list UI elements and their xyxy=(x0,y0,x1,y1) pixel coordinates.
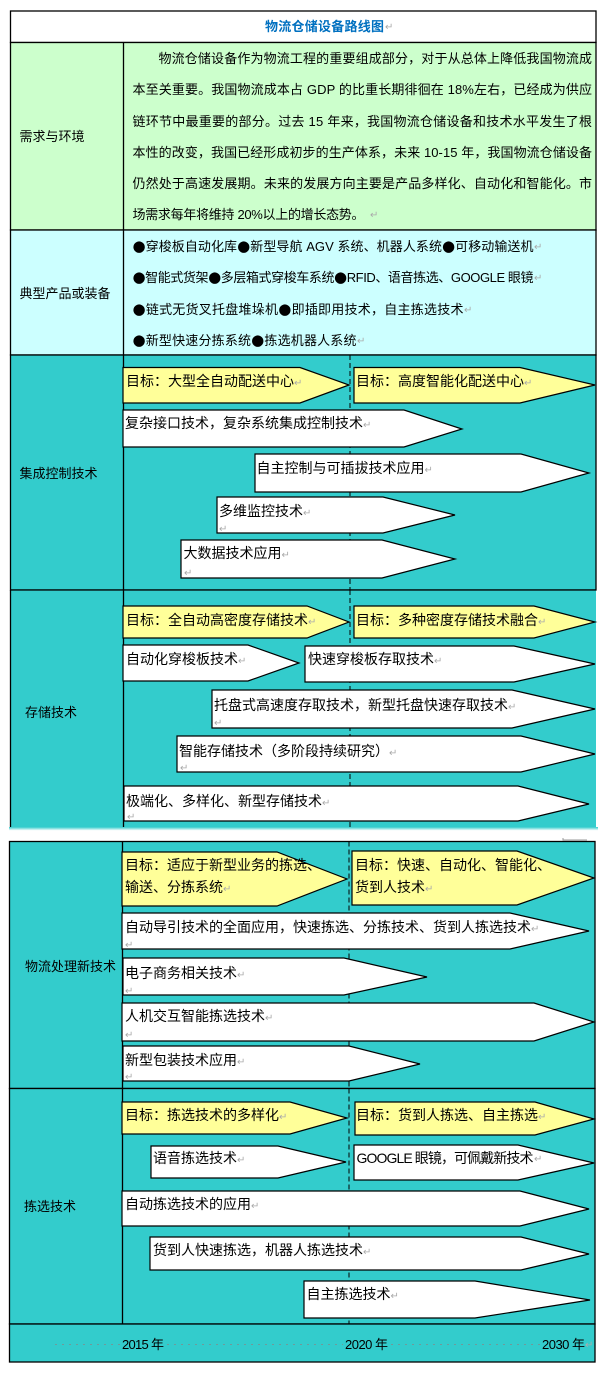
arrow: robot picking xyxy=(150,1237,589,1270)
arrow: pallet storage: ↵ xyxy=(214,718,222,729)
arrow: extreme storage xyxy=(124,786,589,823)
arrow: extreme storage: ↵ xyxy=(127,812,135,823)
product list: ↵ xyxy=(534,273,542,284)
goal arrow: diverse picking xyxy=(122,1102,347,1134)
paragraph: demand description: 场需求每年将维持 20%以上的增长态势。 xyxy=(132,207,364,222)
goal arrow: diverse picking: 目标：拣选技术的多样化↵ xyxy=(125,1107,287,1123)
arrow: Google glasses xyxy=(354,1145,594,1180)
goal arrow: multi-density fusion xyxy=(354,606,595,638)
arrow: big data: ↵ xyxy=(184,568,192,579)
arrow: fast shuttle xyxy=(305,646,595,682)
goal arrow: new business picking systems: 输送、分拣系统↵ xyxy=(125,879,231,895)
arrow: automated shuttle: 自动化穿梭板技术↵ xyxy=(126,651,246,667)
goal arrow: new business picking systems: 目标：适应于新型业务的拣选、 xyxy=(125,857,321,873)
goal arrow: new business picking systems xyxy=(122,852,347,906)
arrow: packaging: 新型包装技术应用↵ xyxy=(125,1052,245,1068)
paragraph: demand description: 本性的改变，我国已经形成初步的生产体系，未来 10-15 年，我国物流仓储设备 xyxy=(132,145,592,160)
arrow: human machine interaction: 人机交互智能拣选技术↵ xyxy=(125,1008,273,1024)
label: picking: 拣选技术 xyxy=(24,1199,76,1214)
arrow: voice picking xyxy=(151,1146,346,1178)
goal arrow: goods to person xyxy=(355,1102,594,1135)
arrow: intelligent storage xyxy=(177,736,595,774)
arrow: big data: 大数据技术应用↵ xyxy=(184,545,290,561)
arrow: automated guidance: ↵ xyxy=(125,940,133,951)
product list: ●穿梭板自动化库●新型导航 AGV 系统、机器人系统●可移动输送机 xyxy=(132,237,534,255)
goal arrow: fast automated goods to person xyxy=(352,851,594,905)
arrow: complex interface technology xyxy=(123,410,462,447)
product list: ↵ xyxy=(357,336,365,347)
arrow: intelligent storage: 智能存储技术（多阶段持续研究）↵ xyxy=(179,743,397,759)
arrow: Google glasses: GOOGLE 眼镜，可佩戴新技术 xyxy=(356,1150,534,1166)
arrow: e-commerce xyxy=(123,958,427,997)
arrow: autonomous control xyxy=(255,454,589,492)
arrow: automated guidance: 自动导引技术的全面应用，快速拣选、分拣技术、货到人拣选技术↵ xyxy=(125,919,539,935)
goal arrow: fast automated goods to person: 货到人技术↵ xyxy=(355,879,433,895)
arrow: complex interface technology: 复杂接口技术，复杂系统集成控制技术↵ xyxy=(125,415,371,431)
arrow: Google glasses: ↵ xyxy=(534,1154,542,1165)
arrow: multi-dimensional monitoring xyxy=(217,497,455,535)
goal arrow: fast automated goods to person: 目标：快速、自动化、智能化、 xyxy=(355,857,551,873)
paragraph: demand description: 本至关重要。我国物流成本占 GDP 的比重长期徘徊在 18%左右，已经成为供应 xyxy=(132,82,592,97)
goal arrow: goods to person: 目标：货到人拣选、自主拣选↵ xyxy=(356,1107,546,1123)
paragraph: demand description: ↵ xyxy=(370,210,378,221)
arrow: e-commerce: 电子商务相关技术↵ xyxy=(125,965,245,981)
product list: ●链式无货叉托盘堆垛机●即插即用技术，自主拣选技术 xyxy=(132,300,464,318)
label: logistics handling: 物流处理新技术 xyxy=(25,959,116,974)
arrow: autonomous picking: 自主拣选技术↵ xyxy=(306,1286,399,1302)
arrow: human machine interaction xyxy=(122,1003,594,1041)
product list: ●智能式货架●多层箱式穿梭车系统●RFID、语音拣选、GOOGLE 眼镜 xyxy=(132,268,534,286)
arrow: pallet storage xyxy=(212,690,595,729)
product list: ↵ xyxy=(464,305,472,316)
arrow: human machine interaction: ↵ xyxy=(125,1030,133,1041)
arrow: automated guidance xyxy=(122,913,589,951)
label: integrated control: 集成控制技术 xyxy=(20,466,98,481)
arrow: robot picking: 货到人快速拣选，机器人拣选技术↵ xyxy=(153,1242,371,1258)
arrow: automated picking xyxy=(122,1191,589,1226)
product list xyxy=(132,237,542,349)
arrow: packaging xyxy=(123,1046,420,1083)
paragraph: demand description xyxy=(132,51,592,222)
goal arrow: multi-density fusion: 目标：多种密度存储技术融合↵ xyxy=(356,612,546,628)
goal arrow: highly intelligent distribution center: 目标：高度智能化配送中心↵ xyxy=(356,373,532,389)
panel: new logistics handling technology xyxy=(10,842,595,1088)
arrow: fast shuttle: 快速穿梭板存取技术↵ xyxy=(308,651,442,667)
goal arrow: high density storage: 目标：全自动高密度存储技术↵ xyxy=(126,612,316,628)
goal arrow: large automated distribution center: 目标：大型全自动配送中心↵ xyxy=(126,373,302,389)
arrow: e-commerce: ↵ xyxy=(125,986,133,997)
year 2015: 2015 年 xyxy=(122,1337,164,1352)
timeline axis xyxy=(10,1324,595,1362)
arrow: automated picking: 自动拣选技术的应用↵ xyxy=(125,1196,259,1212)
title row xyxy=(10,11,596,42)
arrow: packaging: ↵ xyxy=(125,1072,133,1083)
arrow: voice picking: 语音拣选技术↵ xyxy=(153,1150,245,1166)
paragraph: demand description: 仍然处于高速发展期。未来的发展方向主要是产品多样化、自动化和智能化。市 xyxy=(132,176,592,191)
arrow: big data xyxy=(181,540,455,579)
arrow: multi-dimensional monitoring: 多维监控技术↵ xyxy=(219,503,311,519)
product list: ↵ xyxy=(534,242,542,253)
label: demand and environment: 需求与环境 xyxy=(20,129,84,144)
title row: ↵ xyxy=(385,22,393,33)
panel: typical products or equipment xyxy=(10,230,596,355)
goal arrow: highly intelligent distribution center xyxy=(354,368,595,403)
paragraph: demand description: 物流仓储设备作为物流工程的重要组成部分，对于从总体上降低我国物流成 xyxy=(158,51,592,66)
arrow: pallet storage: 托盘式高速度存取技术，新型托盘快速存取技术↵ xyxy=(214,697,516,713)
arrow: automated shuttle xyxy=(123,645,299,681)
product list: ●新型快速分拣系统●拣选机器人系统 xyxy=(132,331,356,349)
year 2030: ↵ xyxy=(585,1340,593,1351)
goal arrow: high density storage xyxy=(123,606,349,638)
panel: integrated control technology xyxy=(10,355,596,590)
arrow: autonomous control: 自主控制与可插拔技术应用↵ xyxy=(256,460,433,476)
arrow: extreme storage: 极端化、多样化、新型存储技术↵ xyxy=(126,793,330,809)
panel: storage technology xyxy=(10,590,596,828)
label: storage: 存储技术 xyxy=(25,705,77,720)
panel: demand and environment xyxy=(10,42,596,230)
goal arrow: large automated distribution center xyxy=(123,368,349,403)
panel: picking technology xyxy=(10,1088,595,1324)
label: typical products: 典型产品或装备 xyxy=(20,286,110,301)
title row: 物流仓储设备路线图 xyxy=(265,19,384,34)
paragraph: demand description: 链环节中最重要的部分。过去 15 年来，我国物流仓储设备和技术水平发生了根 xyxy=(132,114,592,129)
arrow: autonomous picking xyxy=(304,1281,590,1318)
arrow: multi-dimensional monitoring: ↵ xyxy=(219,524,227,535)
arrow: intelligent storage: ↵ xyxy=(180,763,188,774)
year 2030: 2030 年 xyxy=(542,1337,585,1352)
year 2020: 2020 年 xyxy=(345,1337,388,1352)
